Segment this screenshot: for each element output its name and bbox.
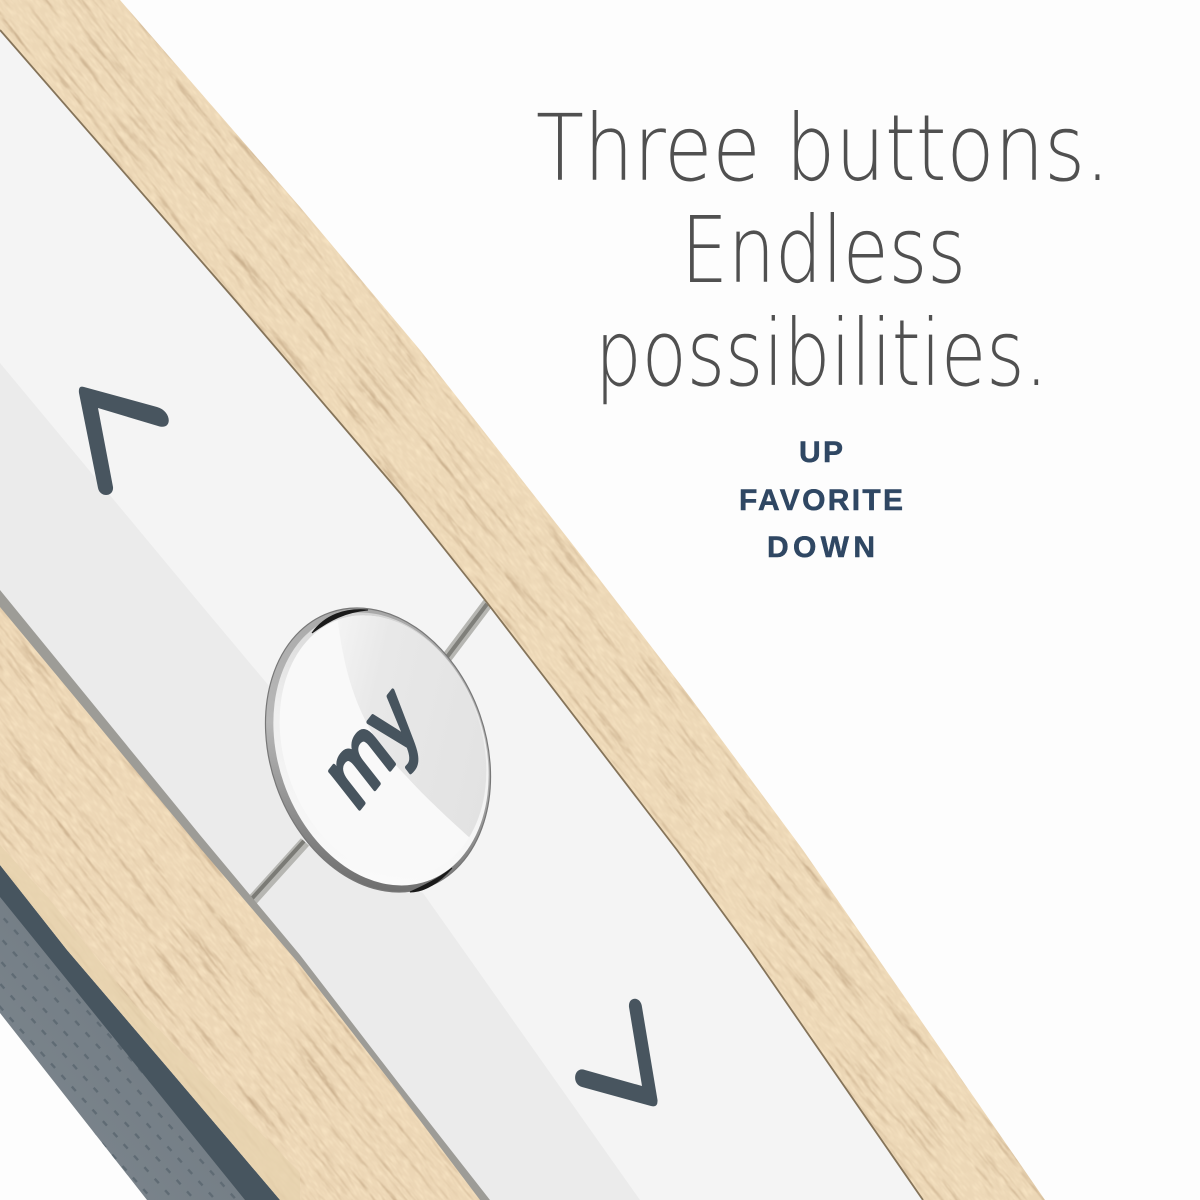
down arrow icon	[575, 999, 658, 1106]
button face	[280, 615, 486, 837]
wood frame: lower strip	[0, 607, 480, 1200]
panel shading: lower button	[256, 842, 640, 1200]
label: up: UP	[799, 436, 843, 469]
panel shading: upper button	[0, 363, 305, 897]
my button	[264, 607, 492, 893]
perforated dot texture	[0, 865, 280, 1200]
button rim	[228, 577, 528, 923]
my label: my	[306, 664, 435, 829]
headline line 2: Endless	[681, 197, 966, 304]
label: down: DOWN	[767, 531, 875, 564]
rim highlight	[238, 583, 524, 915]
dark shell lip	[0, 865, 280, 1200]
grey groove beside lower wood strip	[0, 590, 490, 1200]
rim dark glint: bottom	[410, 868, 452, 892]
headline line 1: Three buttons.	[536, 95, 1110, 202]
remote control face panel	[0, 30, 923, 1200]
wood frame inner edge line	[0, 30, 923, 1200]
button gap: upper	[444, 603, 488, 661]
button names list	[739, 436, 903, 564]
label: favorite: FAVORITE	[739, 484, 903, 517]
glossy shade on the face	[344, 616, 486, 837]
up arrow icon	[79, 387, 169, 495]
rim dark glint: top	[312, 610, 368, 633]
dark grey rear shell	[0, 865, 280, 1200]
headline	[536, 95, 1110, 407]
button gap: lower	[247, 841, 305, 905]
wood bevel	[0, 845, 300, 1200]
headline line 3: possibilities.	[595, 300, 1048, 407]
